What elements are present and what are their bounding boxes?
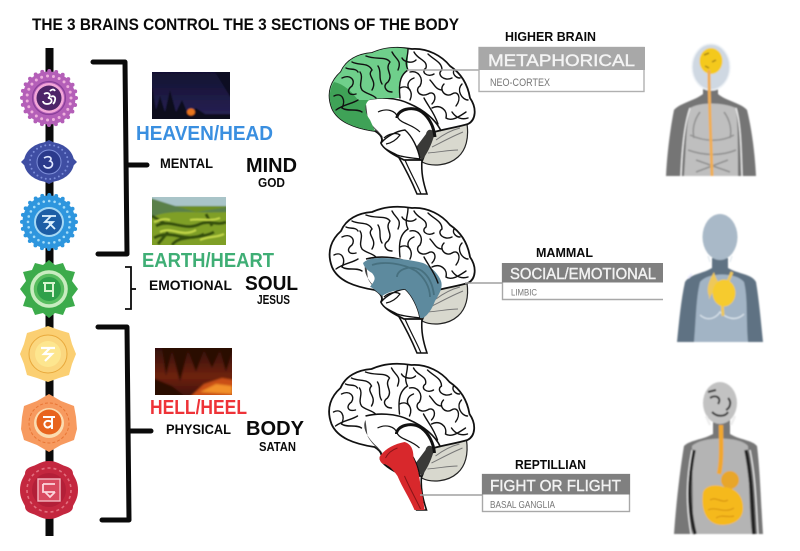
figure: brain highlighted body [666,44,756,176]
connector: basal ganglia [420,494,483,496]
label box: metaphorical: NEO-CORTEX [490,77,551,89]
text: emotional: EMOTIONAL [149,278,232,293]
icon: heart chakra [20,260,78,318]
photo: night sky [152,72,230,119]
text: mammal: MAMMAL [536,245,593,260]
text: mind: MIND [246,155,297,177]
spine line [46,48,54,536]
brain: limbic highlighted [330,207,475,353]
brain: neo-cortex highlighted [330,48,475,194]
icon: sacral chakra [21,394,77,452]
figure: gut highlighted body [674,382,763,534]
text: mental: MENTAL [160,156,213,171]
label box: fight or flight: BASAL GANGLIA [490,500,555,511]
photo: hell cave [155,348,232,395]
chakra column [20,48,78,536]
text: reptillian: REPTILLIAN [515,457,586,472]
text: higher brain: HIGHER BRAIN [505,29,596,44]
heading: heaven: HEAVEN/HEAD [136,122,273,145]
label box: fight or flight: FIGHT OR FLIGHT [490,478,622,495]
icon: crown chakra [22,71,76,125]
connector: neo-cortex [407,69,479,71]
label box: social/emotional: LIMBIC [511,288,537,298]
icon: solar plexus chakra [20,326,76,382]
photo: green hills [152,197,226,245]
heading: hell: HELL/HEEL [150,396,247,419]
icon: third eye chakra [21,140,77,184]
text: body: BODY [246,418,305,440]
text: god: GOD [258,176,285,190]
bracket: soul section [125,267,136,309]
figure: heart highlighted body [677,214,763,342]
label box: fight or flight [482,474,630,512]
label box: social/emotional: SOCIAL/EMOTIONAL [510,266,656,283]
connector: limbic [465,282,503,284]
title: THE 3 BRAINS CONTROL THE 3 SECTIONS OF THE BODY [32,16,459,34]
label box: metaphorical: METAPHORICAL [488,51,635,70]
brain: basal ganglia highlighted [329,364,474,510]
icon: root chakra [20,461,78,519]
text: soul: SOUL [245,273,298,295]
text: physical: PHYSICAL [166,422,231,437]
text: jesus: JESUS [257,293,290,307]
bracket: body section [98,327,151,520]
label box: social/emotional [502,263,663,300]
label box: metaphorical [479,47,645,92]
heading: earth: EARTH/HEART [142,249,274,272]
bracket: mind section [93,62,147,254]
text: satan: SATAN [259,440,296,454]
icon: throat chakra [22,195,76,249]
